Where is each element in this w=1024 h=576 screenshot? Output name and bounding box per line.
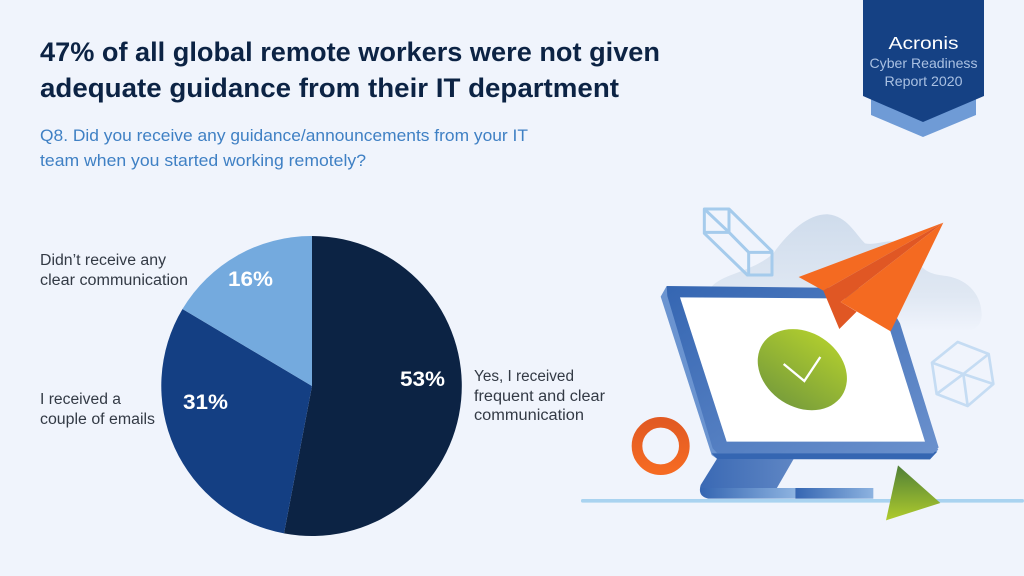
monitor frame — [667, 286, 939, 453]
cloud — [712, 214, 982, 332]
badge front ribbon — [863, 0, 984, 122]
check mark — [784, 357, 820, 381]
monitor base highlight — [795, 488, 873, 499]
pie chart — [161, 236, 462, 536]
subtitle question — [40, 126, 528, 170]
monitor stand — [700, 457, 795, 498]
value labels: 16% — [228, 268, 273, 291]
pie label: yes: Yes, I received — [474, 368, 574, 385]
illustration: computer with paper plane — [581, 209, 1024, 520]
slice: 16% no communication — [182, 236, 312, 386]
report badge — [863, 0, 984, 137]
pie label: yes: frequent and clear — [474, 388, 605, 405]
pie label: couple of emails: couple of emails — [40, 411, 155, 428]
badge brand name: Acronis — [888, 33, 959, 53]
pie label: couple of emails — [40, 391, 155, 428]
wireframe box top left — [704, 209, 772, 275]
ground line — [581, 499, 1024, 503]
monitor bottom edge — [712, 452, 937, 459]
subtitle question: Q8. Did you receive any guidance/announcements from your IT — [40, 126, 528, 145]
pie label: no clear communication — [40, 252, 188, 289]
pie label: yes: communication — [474, 407, 584, 424]
monitor base — [701, 488, 795, 499]
value labels — [183, 268, 445, 414]
value labels: 31% — [183, 391, 228, 414]
orange ring — [637, 422, 684, 470]
slice: 53% yes — [284, 236, 462, 536]
green check badge — [742, 313, 862, 427]
plane left wing — [799, 223, 943, 291]
monitor screen — [680, 297, 925, 442]
badge report name: Report 2020 — [884, 73, 963, 89]
green triangle — [886, 465, 940, 520]
title — [40, 37, 660, 103]
badge back ribbon — [871, 95, 976, 137]
monitor frame side — [661, 286, 938, 459]
pie label: yes — [474, 368, 605, 424]
plane fold — [823, 223, 943, 329]
title: 47% of all global remote workers were not given — [40, 37, 660, 67]
pie label: no clear communication: Didn’t receive any — [40, 252, 166, 269]
wireframe hexagon right — [932, 342, 993, 406]
subtitle question: team when you started working remotely? — [40, 151, 366, 170]
badge report name — [870, 55, 978, 89]
value labels: 53% — [400, 368, 445, 391]
pie label: couple of emails: I received a — [40, 391, 121, 408]
slice: 31% couple of emails — [161, 309, 312, 533]
title: adequate guidance from their IT department — [40, 73, 619, 103]
plane right wing — [841, 223, 943, 331]
badge report name: Cyber Readiness — [870, 55, 978, 71]
pie label: no clear communication: clear communication — [40, 272, 188, 289]
paper plane — [799, 223, 943, 331]
